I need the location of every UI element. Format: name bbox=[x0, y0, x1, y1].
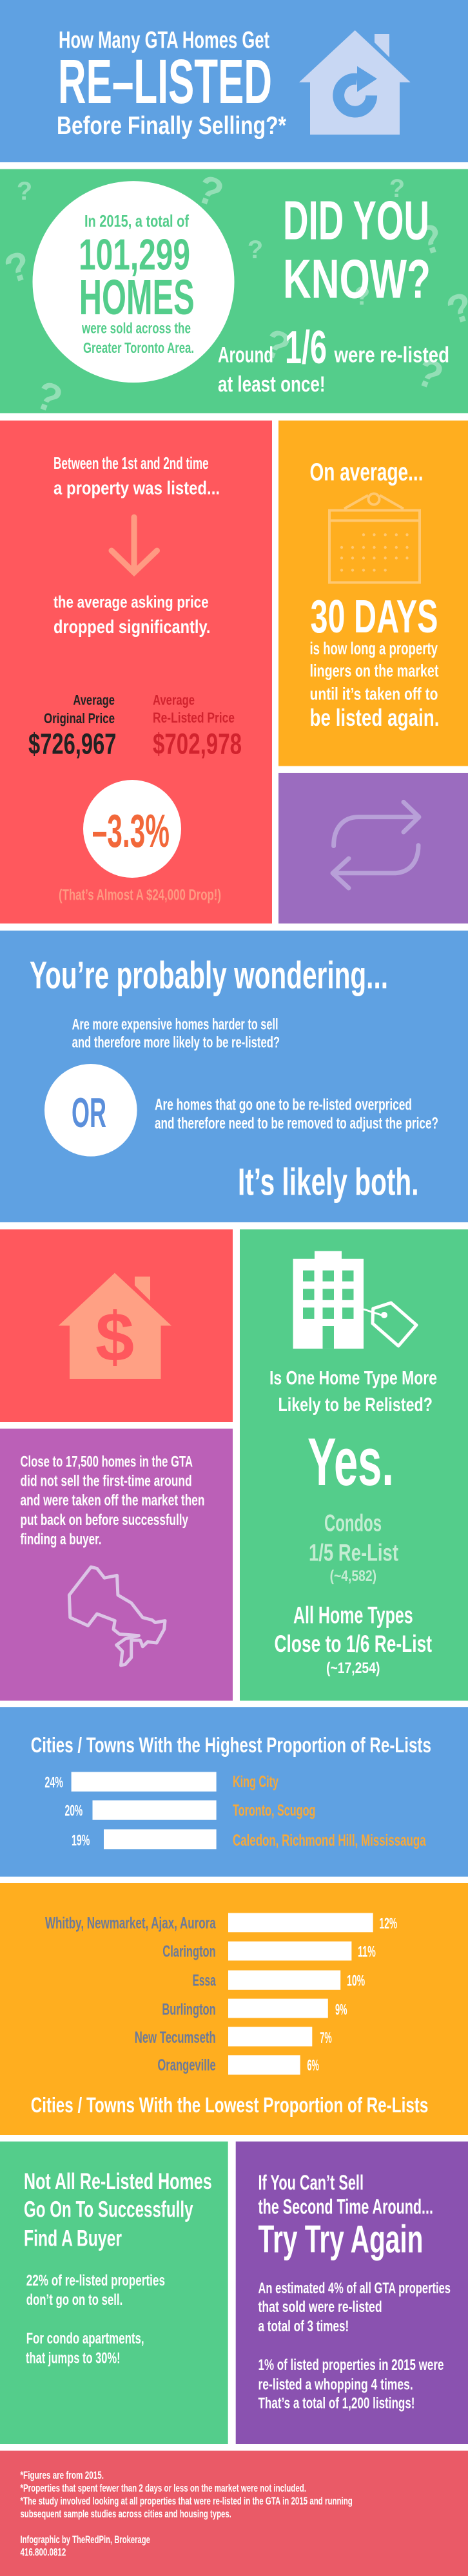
panel: highest proportion bbox=[0, 1707, 468, 1877]
bar chart: lowest: 7% bbox=[320, 2029, 332, 2047]
stat: condos bbox=[309, 1510, 398, 1585]
text: 22 percent: don’t go on to sell. bbox=[26, 2291, 122, 2309]
heading: not all homes bbox=[24, 2169, 212, 2251]
decorative question marks: ? bbox=[257, 320, 297, 370]
stat: all home types: All Home Types bbox=[293, 1602, 413, 1628]
panel: try try again bbox=[236, 2141, 468, 2444]
stat: average original price: $726,967 bbox=[28, 728, 116, 761]
heading: not all homes: Not All Re-Listed Homes bbox=[24, 2169, 212, 2194]
text: close to 17,500 homes: put back on before successfully bbox=[21, 1511, 188, 1529]
stat: condos: 1/5 Re-List bbox=[309, 1539, 398, 1566]
icon: repeat arrows bbox=[333, 802, 419, 888]
stat: condos: Condos bbox=[324, 1510, 382, 1537]
heading: not all homes: Go On To Successfully bbox=[24, 2197, 193, 2222]
stat: all home types: (~17,254) bbox=[326, 1660, 380, 1677]
heading: try try again bbox=[258, 2171, 433, 2260]
text: 4 percent and 1 percent: a total of 3 times! bbox=[258, 2318, 349, 2335]
icon: house with re-list arrow bbox=[299, 30, 411, 135]
text: close to 17,500 homes: Close to 17,500 homes in the GTA bbox=[21, 1454, 193, 1471]
bar chart: lowest: 10% bbox=[347, 1972, 365, 1989]
panel: 17,500 homes bbox=[0, 1428, 233, 1701]
text: footnotes bbox=[21, 2470, 353, 2520]
text: close to 17,500 homes: and were taken off the market then bbox=[21, 1492, 205, 1510]
decorative question marks bbox=[0, 166, 468, 422]
decorative question marks: ? bbox=[190, 166, 229, 216]
title: Before Finally Selling?* bbox=[57, 112, 287, 140]
bar chart: lowest: 11% bbox=[358, 1943, 376, 1960]
text: almost 24,000 drop: (That’s Almost A $24,000 Drop!) bbox=[59, 887, 221, 904]
heading: home type question bbox=[269, 1368, 437, 1416]
panel: house dollar icon bbox=[0, 1229, 233, 1422]
text: one sixth re-listed bbox=[218, 322, 449, 397]
text: between listings: a property was listed... bbox=[54, 478, 220, 498]
title bbox=[57, 27, 287, 140]
decorative question marks: ? bbox=[389, 175, 405, 203]
text: footnotes: *Properties that spent fewer than 2 days or less on the market were not included. bbox=[21, 2483, 306, 2494]
text: on average: On average... bbox=[309, 459, 423, 486]
panel: header bbox=[0, 0, 468, 162]
text: credit: 416.800.0812 bbox=[21, 2547, 66, 2559]
bar chart: lowest: 9% bbox=[335, 2001, 347, 2018]
bar chart: highest: 20% bbox=[64, 1802, 83, 1819]
callout: total homes sold circle: 101,299 bbox=[79, 230, 190, 279]
heading: not all homes: Find A Buyer bbox=[24, 2226, 122, 2251]
bar chart: lowest: Essa bbox=[193, 1971, 216, 1989]
icon: condo building with tag bbox=[293, 1251, 416, 1349]
panel: lowest proportion bbox=[0, 1883, 468, 2135]
heading: did you know bbox=[283, 190, 431, 310]
text: 4 percent and 1 percent bbox=[258, 2280, 451, 2412]
text: question two bbox=[155, 1095, 438, 1133]
text: 4 percent and 1 percent: re-listed a whopping 4 times. bbox=[258, 2376, 413, 2393]
panel: not all re-listed homes sell bbox=[0, 2141, 228, 2444]
callout: or circle: OR bbox=[72, 1089, 106, 1136]
panel: you're probably wondering bbox=[0, 931, 468, 1222]
callout: percent drop: –3.3% bbox=[92, 806, 170, 857]
text: footnotes: subsequent sample studies across cities and housing types. bbox=[21, 2508, 231, 2520]
text: close to 17,500 homes: finding a buyer. bbox=[21, 1531, 102, 1548]
stat: average re-listed price: $702,978 bbox=[153, 728, 242, 761]
bar chart: highest: Toronto, Scugog bbox=[233, 1801, 315, 1819]
bar chart: lowest: 6% bbox=[307, 2057, 319, 2074]
text: 22 percent: 22% of re-listed properties bbox=[26, 2272, 165, 2289]
icon: ontario outline bbox=[69, 1567, 165, 1665]
bar chart: lowest: Orangeville bbox=[157, 2056, 216, 2074]
icon: house with dollar sign bbox=[59, 1273, 171, 1379]
stat: average re-listed price: Re-Listed Price bbox=[153, 710, 235, 726]
stat: average original price: Average bbox=[73, 692, 115, 708]
heading: yes: Yes. bbox=[307, 1425, 394, 1500]
text: close to 17,500 homes: did not sell the first-time around bbox=[21, 1473, 192, 1490]
text: one sixth re-listed: at least once! bbox=[218, 372, 326, 397]
panel: 30 days bbox=[278, 421, 468, 766]
panel: home type bbox=[240, 1229, 468, 1701]
stat: condos: (~4,582) bbox=[330, 1567, 376, 1585]
text: question one: Are more expensive homes harder to sell bbox=[72, 1016, 278, 1033]
bar chart: highest bbox=[44, 1772, 426, 1850]
text: 4 percent and 1 percent: that sold were re-listed bbox=[258, 2298, 382, 2316]
text: price dropped bbox=[54, 592, 210, 638]
bar chart: lowest: 12% bbox=[379, 1915, 397, 1932]
title: RE–LISTED bbox=[58, 46, 272, 117]
text: close to 17,500 homes bbox=[21, 1454, 205, 1548]
callout: total homes sold circle: Greater Toronto Area. bbox=[83, 339, 194, 356]
stat: all home types bbox=[275, 1602, 432, 1677]
bar chart: highest: 24% bbox=[44, 1774, 63, 1791]
icon: calendar bbox=[329, 493, 420, 582]
heading: try try again: If You Can’t Sell bbox=[258, 2171, 364, 2194]
text: one sixth re-listed: Around bbox=[218, 343, 273, 367]
callout: percent drop bbox=[83, 780, 181, 878]
icon: house with dollar sign: $ bbox=[95, 1298, 134, 1376]
text: question one: and therefore more likely to be re-listed? bbox=[72, 1034, 280, 1052]
callout: total homes sold circle: HOMES bbox=[79, 270, 195, 325]
callout: total homes sold circle bbox=[32, 181, 235, 383]
decorative question marks: ? bbox=[248, 236, 263, 264]
text: footnotes: *Figures are from 2015. bbox=[21, 2470, 104, 2481]
text: 22 percent: For condo apartments, bbox=[26, 2330, 144, 2347]
text: credit: Infographic by TheRedPin, Brokerage bbox=[21, 2534, 150, 2546]
text: question one bbox=[72, 1016, 280, 1052]
text: 22 percent: that jumps to 30%! bbox=[26, 2349, 121, 2367]
stat: average original price: Original Price bbox=[44, 710, 115, 726]
decorative question marks: ? bbox=[29, 372, 68, 422]
text: price dropped: the average asking price bbox=[54, 592, 209, 612]
title: How Many GTA Homes Get bbox=[59, 27, 269, 53]
decorative question marks: ? bbox=[412, 215, 449, 265]
callout: total homes sold circle: In 2015, a total of bbox=[84, 211, 189, 231]
text: price dropped: dropped significantly. bbox=[54, 617, 210, 638]
callout: or circle bbox=[44, 1064, 137, 1157]
text: between listings: Between the 1st and 2nd time bbox=[54, 453, 209, 473]
bar chart: highest: King City bbox=[233, 1773, 278, 1791]
panel: asking price drop bbox=[0, 421, 272, 923]
stat: 30 days bbox=[309, 591, 440, 731]
bar chart: lowest: Burlington bbox=[162, 2000, 216, 2018]
stat: average re-listed price bbox=[153, 692, 242, 761]
decorative question marks: ? bbox=[410, 349, 449, 399]
decorative question marks: ? bbox=[355, 282, 370, 310]
decorative question marks: ? bbox=[0, 243, 36, 292]
text: 22 percent bbox=[26, 2272, 165, 2367]
bar chart: lowest: New Tecumseth bbox=[135, 2029, 216, 2047]
text: between listings bbox=[54, 453, 220, 498]
bar chart: lowest: Clarington bbox=[162, 1942, 216, 1960]
bar chart: lowest bbox=[45, 1913, 397, 2075]
panel: footer notes bbox=[0, 2451, 468, 2576]
decorative question marks: ? bbox=[17, 177, 32, 205]
bar chart: lowest: Whitby, Newmarket, Ajax, Aurora bbox=[45, 1914, 216, 1932]
stat: average re-listed price: Average bbox=[153, 692, 195, 708]
callout: total homes sold circle: were sold across the bbox=[81, 319, 191, 336]
panel: did you know bbox=[0, 166, 468, 422]
text: credit bbox=[21, 2534, 150, 2559]
text: one sixth re-listed: 1/6 bbox=[285, 322, 327, 374]
stat: average original price bbox=[28, 692, 116, 761]
bar chart: highest: 19% bbox=[72, 1832, 90, 1849]
panel: repeat icon bbox=[278, 773, 468, 923]
arrow: down bbox=[112, 517, 157, 573]
